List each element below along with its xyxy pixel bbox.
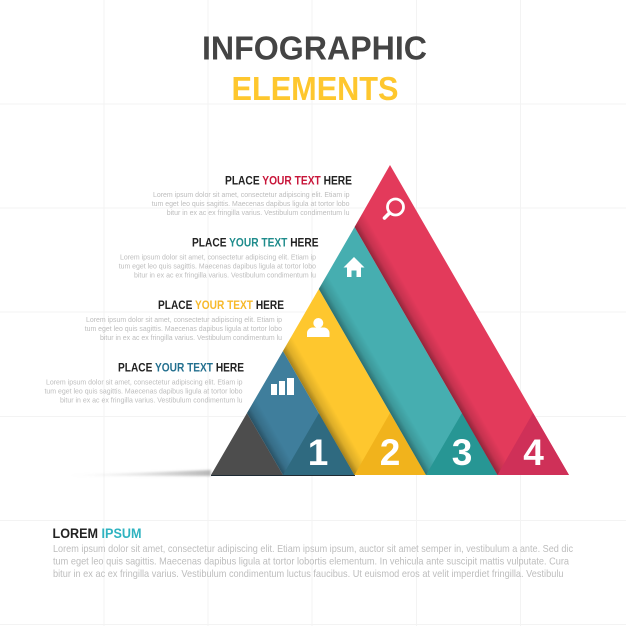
band 1: blue: 1 xyxy=(308,432,328,473)
text block: step 2 yellow xyxy=(85,300,284,342)
text block: lorem ipsum footer: tum eget leo quis sagittis. Maecenas dapibus ligula at tortor lobortis elementum. In vehicula ante suscipit mattis vulputate. Cura xyxy=(53,556,569,568)
title: ELEMENTS xyxy=(232,71,398,108)
base line xyxy=(211,474,355,476)
text block: step 1 blue: Lorem ipsum dolor sit amet, consectetur adipiscing elit. Etiam ip xyxy=(46,378,242,386)
text block: step 2 yellow: bitur in ex ac ex fringilla varius. Vestibulum condimentum lu xyxy=(100,333,282,342)
icon: bar chart xyxy=(271,378,294,395)
text block: step 3 teal: tum eget leo quis sagittis. Maecenas dapibus ligula at tortor lobo xyxy=(119,262,316,270)
text block: step 4 red: Lorem ipsum dolor sit amet, consectetur adipiscing elit. Etiam ip xyxy=(153,190,350,199)
band 3: teal: 3 xyxy=(452,432,472,473)
triangle chart xyxy=(211,165,569,476)
title xyxy=(202,30,427,108)
band 3: teal xyxy=(319,227,498,475)
text block: lorem ipsum footer xyxy=(52,526,573,580)
band 2: yellow xyxy=(283,289,426,475)
text block: step 4 red: bitur in ex ac ex fringilla varius. Vestibulum condimentum lu xyxy=(167,208,350,217)
text block: step 4 red: PLACE YOUR TEXT HERE xyxy=(225,176,352,188)
icon: house xyxy=(344,257,364,277)
text block: step 1 blue: PLACE YOUR TEXT HERE xyxy=(118,362,244,374)
text block: step 2 yellow: Lorem ipsum dolor sit amet, consectetur adipiscing elit. Etiam ip xyxy=(86,315,282,324)
text block: step 4 red: tum eget leo quis sagittis. Maecenas dapibus ligula at tortor lobo xyxy=(152,199,350,208)
title: INFOGRAPHIC xyxy=(202,30,427,68)
band 4: red: 4 xyxy=(523,432,544,473)
icon: person xyxy=(307,318,330,337)
text block: lorem ipsum footer: bitur in ex ac ex fringilla varius. Vestibulum condimentum luctus faucibus. Ut euismod eros at velit imperdiet fringilla. Vestibulu xyxy=(53,568,564,580)
text block: step 2 yellow: PLACE YOUR TEXT HERE xyxy=(158,300,284,312)
text block: step 3 teal: PLACE YOUR TEXT HERE xyxy=(192,238,319,250)
floor shadow xyxy=(65,470,211,476)
text block: step 3 teal xyxy=(119,238,319,280)
text block: lorem ipsum footer: LOREM IPSUM xyxy=(52,526,142,541)
band 1: blue xyxy=(247,351,354,475)
text block: step 1 blue: bitur in ex ac ex fringilla varius. Vestibulum condimentum lu xyxy=(60,396,242,404)
band 4: red xyxy=(355,165,569,475)
band: dark grey base xyxy=(211,413,283,475)
text block: step 3 teal: bitur in ex ac ex fringilla varius. Vestibulum condimentum lu xyxy=(134,270,316,280)
text block: step 2 yellow: tum eget leo quis sagittis. Maecenas dapibus ligula at tortor lobo xyxy=(85,324,282,333)
text block: step 1 blue: tum eget leo quis sagittis. Maecenas dapibus ligula at tortor lobo xyxy=(44,386,242,396)
band 2: yellow: 2 xyxy=(380,432,400,473)
text block: step 4 red xyxy=(152,176,352,217)
icon: magnifier xyxy=(384,199,404,218)
text block: step 3 teal: Lorem ipsum dolor sit amet, consectetur adipiscing elit. Etiam ip xyxy=(120,252,316,262)
text block: step 1 blue xyxy=(44,362,244,404)
